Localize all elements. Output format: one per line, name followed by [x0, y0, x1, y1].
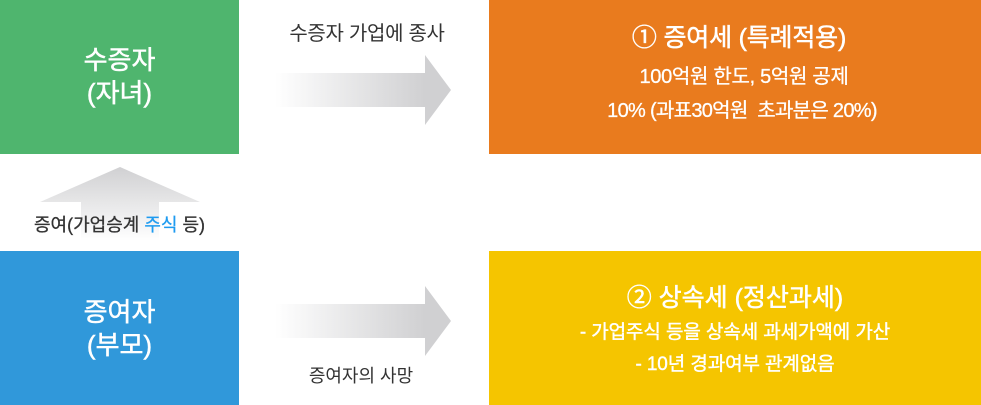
arrow: bottom right — [275, 286, 451, 356]
panel: recipient — [0, 0, 239, 154]
recipient label — [84, 45, 155, 108]
donor label: (부모) — [87, 330, 152, 360]
recipient label: (자녀) — [87, 78, 152, 108]
donor label — [84, 297, 155, 360]
arrow: up — [40, 167, 200, 241]
caption: recipient joins the business: 수증자 가업에 종사 — [289, 23, 445, 45]
panel: inheritance tax — [489, 251, 981, 405]
caption: gift of shares: 증여(가업승계 주식 등) — [34, 215, 205, 235]
panel: gift tax — [489, 0, 981, 154]
recipient label: 수증자 — [84, 45, 155, 75]
gift tax heading: ① 증여세 (특례적용) — [632, 24, 846, 52]
donor label: 증여자 — [84, 297, 155, 327]
gift tax rate: 10% (과표30억원 초과분은 20%) — [607, 100, 877, 122]
inheritance tax heading: ② 상속세 (정산과세) — [627, 284, 843, 312]
gift tax limit: 100억원 한도, 5억원 공제 — [639, 66, 849, 88]
caption: donor's death: 증여자의 사망 — [309, 366, 413, 386]
inheritance tax note 2: - 10년 경과여부 관계없음 — [635, 354, 835, 375]
panel: donor — [0, 251, 239, 405]
inheritance tax note 1: - 가업주식 등을 상속세 과세가액에 가산 — [580, 322, 890, 343]
arrow: top right — [275, 55, 451, 125]
